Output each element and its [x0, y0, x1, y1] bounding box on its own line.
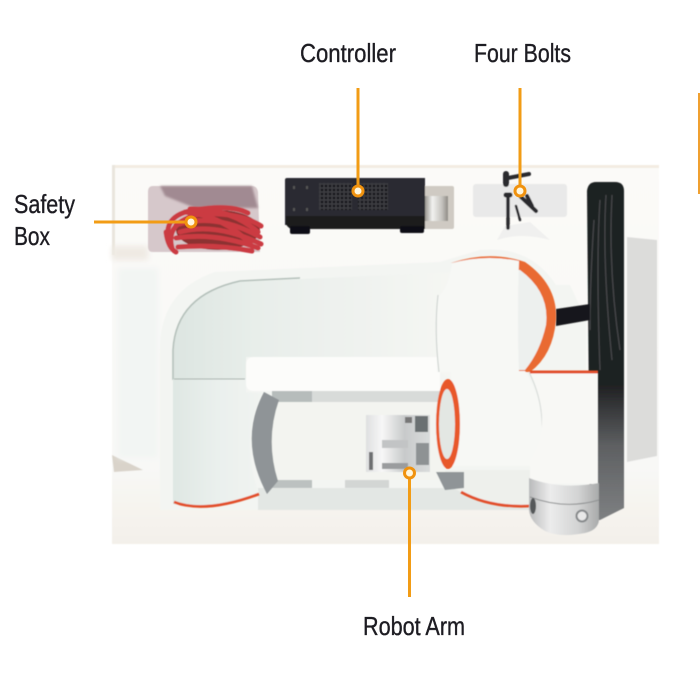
- panel: safety box pocket with red cable: [148, 186, 261, 252]
- icon: controller: [285, 178, 454, 234]
- arm: top orange ring: [451, 256, 556, 372]
- arm: grey ring: [252, 392, 279, 494]
- panel: robot arm: [173, 256, 599, 535]
- arm: white support bar: [246, 357, 440, 391]
- red cable coil: [166, 208, 261, 252]
- callout: Robot Arm: [363, 468, 465, 641]
- panel: foam packaging box: [112, 165, 659, 544]
- callout: clipped orange line at right edge: [698, 93, 700, 194]
- connector: [420, 186, 454, 229]
- arm: upper joint: [437, 258, 519, 372]
- callout: Safety Box: Safety: [14, 189, 75, 219]
- arm: wrist joint: [530, 372, 598, 484]
- arm: lower right base: [445, 470, 530, 507]
- callout: Controller: [300, 38, 396, 196]
- callout: Four Bolts: Four Bolts: [474, 38, 571, 68]
- arm: lower base joint: [173, 379, 262, 506]
- callout: Safety Box: [14, 189, 196, 251]
- arm: main cylinder: [271, 402, 445, 480]
- arm: grey bands behind cylinder: [272, 391, 312, 403]
- icon: black cable bundle: [556, 182, 624, 520]
- arm: base orange ring: [174, 494, 259, 506]
- callout: Four Bolts: [474, 38, 571, 196]
- arm: product label: [366, 415, 430, 472]
- arm: upper elbow link: [173, 272, 452, 380]
- foam: right shaded recess: [627, 237, 657, 462]
- callout: Robot Arm: Robot Arm: [363, 611, 465, 641]
- callout: Controller: Controller: [300, 38, 396, 68]
- icon: four bolts: [473, 174, 567, 240]
- arm: silver flange: [529, 478, 599, 535]
- arm: middle joint: [451, 371, 543, 466]
- foam: robot cavity: [160, 249, 586, 510]
- callout: Safety Box: Box: [14, 221, 50, 251]
- arm: orange ellipse ring: [436, 379, 460, 469]
